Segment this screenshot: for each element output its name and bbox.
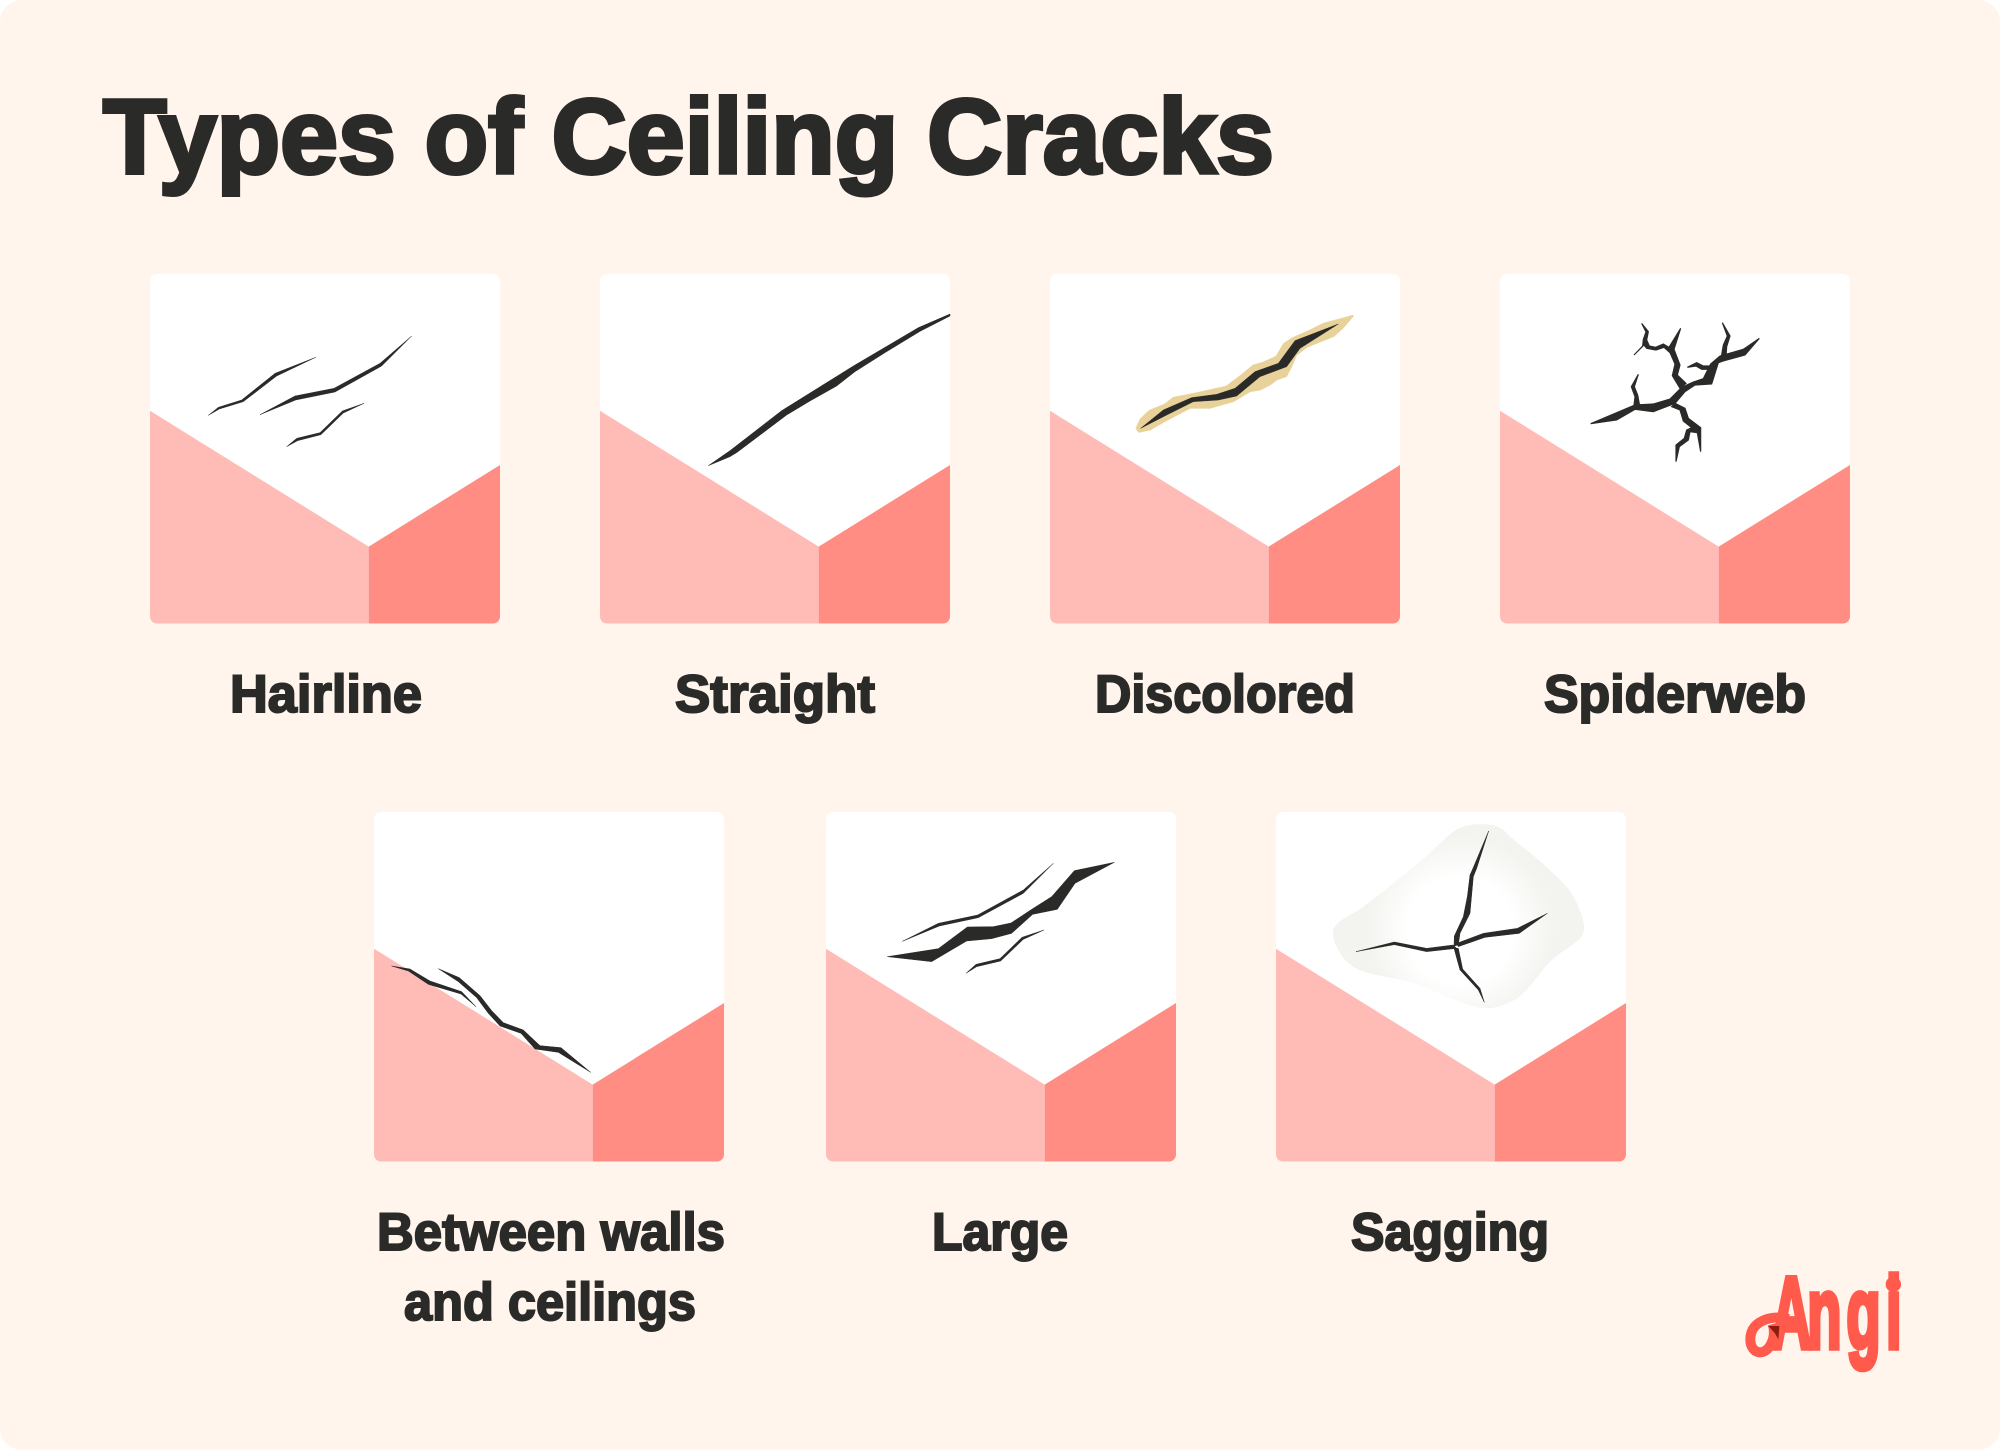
crack line bbox=[1141, 324, 1338, 428]
sagging crack bbox=[1333, 824, 1584, 1008]
straight crack bbox=[708, 314, 950, 466]
wall-ceiling cracks bbox=[392, 966, 591, 1072]
right wall bbox=[1045, 1003, 1176, 1162]
left wall bbox=[826, 949, 1045, 1162]
panel: Straight bbox=[600, 274, 950, 724]
panel: Discolored bbox=[1050, 274, 1400, 724]
left wall bbox=[1276, 949, 1495, 1162]
hairline cracks bbox=[208, 336, 412, 447]
right wall bbox=[1269, 465, 1400, 624]
sagging bulge bbox=[1333, 824, 1584, 1008]
right wall bbox=[1495, 1003, 1626, 1162]
label: Sagging: Sagging bbox=[1351, 1203, 1549, 1262]
label: Between walls and ceilings bbox=[377, 1203, 725, 1332]
right wall bbox=[819, 465, 950, 624]
panel: Sagging bbox=[1276, 812, 1626, 1262]
ceiling surface bbox=[1050, 274, 1400, 624]
crack line right bbox=[1457, 913, 1547, 947]
ceiling surface bbox=[150, 274, 500, 624]
left wall bbox=[1050, 411, 1269, 624]
right wall bbox=[1719, 465, 1850, 624]
ceiling surface bbox=[600, 274, 950, 624]
label: Hairline: Hairline bbox=[230, 665, 422, 724]
ceiling surface bbox=[826, 812, 1176, 1162]
left wall bbox=[150, 411, 369, 624]
label: Spiderweb: Spiderweb bbox=[1544, 665, 1806, 724]
label: Large: Large bbox=[932, 1203, 1068, 1262]
logo swirl bbox=[1750, 1277, 1901, 1352]
left wall bbox=[1500, 411, 1719, 624]
label: Between walls and ceilings: and ceilings bbox=[404, 1273, 696, 1332]
crack line up bbox=[1454, 831, 1489, 946]
discolored crack bbox=[1137, 316, 1353, 432]
left wall bbox=[374, 949, 593, 1162]
label: Straight: Straight bbox=[675, 665, 875, 724]
large cracks bbox=[887, 862, 1114, 973]
spiderweb crack bbox=[1591, 323, 1759, 462]
crack line left bbox=[1356, 942, 1457, 952]
left wall bbox=[600, 411, 819, 624]
title: Types of Ceiling Cracks bbox=[103, 78, 1274, 196]
ceiling surface bbox=[1276, 812, 1626, 1162]
label: Between walls and ceilings: Between walls bbox=[377, 1203, 725, 1262]
panel: Between walls and ceilings bbox=[374, 812, 725, 1332]
crack line down bbox=[1454, 948, 1484, 1002]
water stain bbox=[1137, 316, 1353, 432]
panel: Spiderweb bbox=[1500, 274, 1850, 724]
logo: Angi bbox=[1750, 1256, 1902, 1370]
right wall bbox=[369, 465, 500, 624]
logo wordmark: Angi bbox=[1771, 1256, 1902, 1370]
panel: Large bbox=[826, 812, 1176, 1262]
right wall bbox=[593, 1003, 724, 1162]
ceiling surface bbox=[1500, 274, 1850, 624]
label: Discolored: Discolored bbox=[1095, 665, 1355, 724]
ceiling surface bbox=[374, 812, 724, 1162]
panel: Hairline bbox=[150, 274, 500, 724]
